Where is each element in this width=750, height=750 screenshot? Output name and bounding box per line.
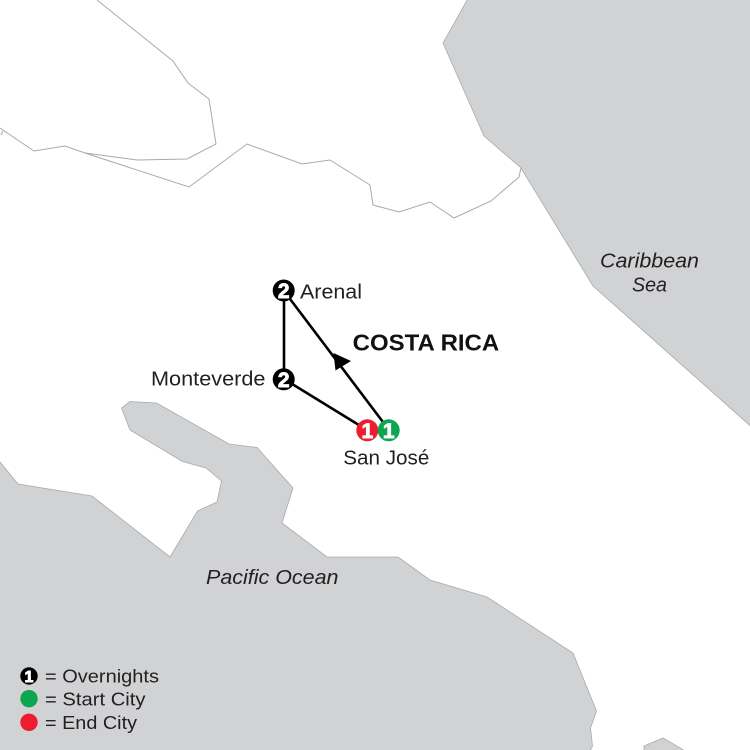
arrow — [334, 353, 351, 370]
marker: Monteverde 2 overnights: 2 — [278, 369, 290, 392]
marker: San José end city — [356, 419, 378, 443]
Pacific Ocean water — [0, 402, 596, 750]
marker: San José start city: 1 — [383, 420, 395, 443]
marker: San José end city: 1 — [361, 420, 373, 443]
marker: Arenal 2 overnights: 2 — [278, 280, 290, 303]
marker: Arenal 2 overnights — [273, 280, 295, 303]
label: Caribbean Sea — [600, 251, 699, 297]
label: Arenal: Arenal — [300, 281, 362, 303]
Caribbean Sea water — [443, 0, 750, 430]
route lines — [284, 291, 389, 430]
label: Costa Rica: COSTA RICA — [353, 330, 499, 356]
marker: Monteverde 2 overnights — [273, 368, 295, 392]
legend: overnights: 1 — [25, 669, 34, 686]
border lines — [0, 0, 521, 218]
marker: San José start city — [378, 419, 400, 443]
label: Caribbean Sea: Caribbean — [600, 251, 699, 273]
southeast water corner — [644, 738, 692, 750]
legend: overnights: = Overnights — [45, 667, 159, 687]
label: Pacific Ocean: Pacific Ocean — [206, 567, 338, 589]
label: Caribbean Sea: Sea — [632, 275, 667, 297]
label: San José: San José — [343, 447, 429, 469]
legend — [20, 667, 159, 733]
legend: end city: = End City — [45, 713, 137, 733]
label: Monteverde: Monteverde — [151, 369, 266, 391]
legend: start city: = Start City — [45, 689, 146, 709]
